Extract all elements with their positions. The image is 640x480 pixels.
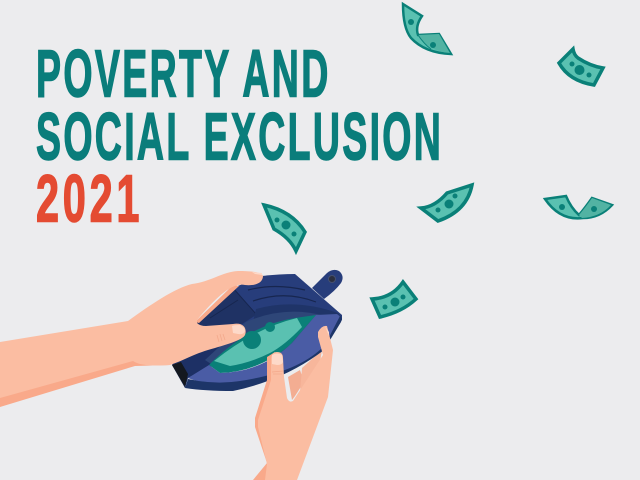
- banknote: right bent: [545, 196, 612, 218]
- hand behind wallet: back fingers: [288, 350, 322, 400]
- fingertip highlight: [252, 272, 262, 275]
- title: 2021: [36, 161, 140, 236]
- hand: [258, 326, 333, 480]
- left hand and arm: [0, 271, 263, 407]
- banknote: top bent: [403, 4, 451, 54]
- title: [36, 36, 441, 236]
- knuckle lines: [272, 371, 283, 374]
- wallet: left dark side: [172, 362, 188, 387]
- arm and hand: [0, 271, 263, 398]
- title: POVERTY AND: [36, 36, 328, 111]
- wallet: dark band: [250, 304, 342, 335]
- arm shadow: [0, 285, 239, 407]
- thumbnail: [232, 325, 245, 334]
- right hand: [253, 326, 333, 480]
- wallet: strap tab: [312, 270, 343, 299]
- banknote: middle: [421, 185, 472, 221]
- wallet: stitching: [248, 286, 316, 302]
- wallet: base: [172, 322, 245, 388]
- fingernail: [272, 354, 283, 365]
- knuckle lines: [217, 334, 225, 342]
- banknote: falling centre: [264, 205, 305, 251]
- wallet: inner lining: [205, 312, 325, 370]
- banknote: top right: [559, 49, 603, 85]
- wallet: strap button: [328, 276, 336, 282]
- wallet: left inner panel: [197, 288, 256, 335]
- title: SOCIAL EXCLUSION: [36, 99, 441, 174]
- wallet: front bottom edge: [185, 316, 342, 391]
- banknote in wallet: [209, 315, 316, 373]
- wallet: [172, 270, 343, 391]
- finger tip: [325, 326, 329, 336]
- wallet: front blue panel: [188, 314, 342, 385]
- wallet: back panel: [197, 274, 342, 350]
- hand shadow edge: [253, 352, 285, 480]
- banknote: near wallet: [372, 282, 416, 317]
